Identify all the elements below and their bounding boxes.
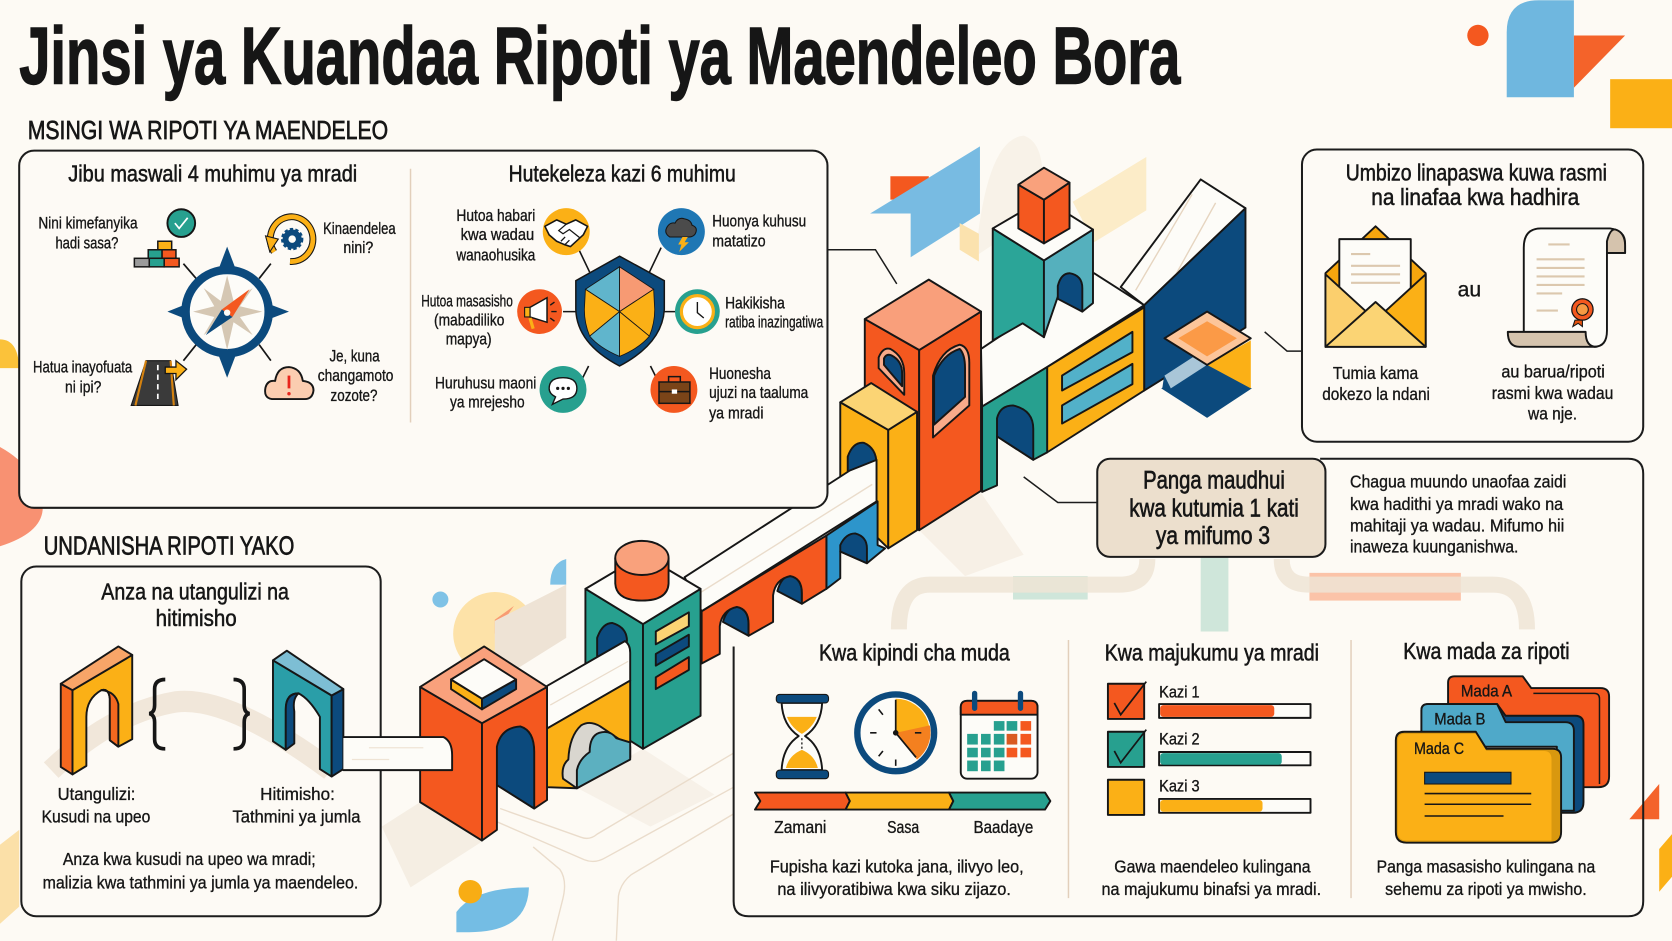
- column: timeline: na ilivyoratibiwa kwa siku zijazo.: [777, 879, 1011, 899]
- task 1: Kazi 1: [1159, 683, 1200, 702]
- folder C: Mada C: [1414, 739, 1464, 758]
- icon: gear cycle: [266, 217, 313, 262]
- task labels: Huonesha: [709, 364, 772, 383]
- icon: envelope: [1325, 226, 1426, 347]
- column: topics: Kwa mada za ripoti: [1403, 638, 1570, 664]
- description text: Chagua muundo unaofaa zaidi: [1350, 472, 1566, 492]
- ramp: [1121, 179, 1245, 391]
- folder B: [1421, 704, 1583, 813]
- description text: inaweza kuunganishwa.: [1350, 537, 1518, 557]
- format labels: Tumia kama: [1333, 363, 1418, 383]
- arch labels: Utangulizi:: [58, 784, 135, 804]
- folder A: Mada A: [1461, 682, 1512, 701]
- link tubes: [899, 557, 1527, 632]
- connector: format panel to cube: [1265, 332, 1302, 351]
- task 2: [1108, 730, 1311, 767]
- blue arcade: [826, 501, 885, 589]
- icon: speech bubble: [540, 366, 586, 413]
- format labels: rasmi kwa wadau: [1492, 383, 1613, 403]
- task labels: ya mrejesho: [450, 393, 525, 412]
- heading: umbizo: [1346, 159, 1607, 210]
- task 3: [1108, 776, 1311, 815]
- column: timeline: Kwa kipindi cha muda: [819, 639, 1010, 665]
- icon: briefcase: [650, 366, 697, 413]
- orange box on teal tower: [1018, 168, 1070, 243]
- text: or: au: [1458, 278, 1481, 302]
- column: tasks: Gawa maendeleo kulingana: [1114, 857, 1311, 877]
- heading: intro and conclusion: hitimisho: [156, 605, 237, 631]
- icon: blocks: [134, 241, 179, 267]
- arch labels: Tathmini ya jumla: [232, 806, 361, 826]
- icon: hourglass: [776, 694, 829, 779]
- icon: megaphone: [517, 289, 562, 334]
- icon: check badge: [167, 209, 195, 237]
- teal arch: [982, 367, 1047, 492]
- heading: six tasks: Hutekeleza kazi 6 muhimu: [509, 161, 736, 187]
- roof: [981, 273, 1144, 407]
- task labels: Huonya kuhusu: [712, 211, 806, 230]
- white beam to teal tower: [547, 641, 630, 729]
- column: topics: [1377, 638, 1609, 899]
- description: malizia kwa tathmini ya jumla ya maendeleo.: [43, 873, 358, 893]
- icon: storm: [658, 208, 705, 255]
- format labels: au barua/ripoti: [1501, 362, 1605, 382]
- task labels: (mabadiliko: [434, 310, 504, 329]
- question labels: nini?: [343, 238, 373, 257]
- icon: warning cloud: [265, 367, 314, 399]
- background shapes behind the isometric building: [870, 136, 1146, 262]
- panel: umbizo: [1302, 150, 1643, 442]
- isometric building: upper section: [840, 168, 1251, 548]
- yellow block with windows: [1047, 307, 1144, 452]
- task labels: ujuzi na taaluma: [709, 383, 809, 402]
- column: timeline: [755, 639, 1050, 899]
- folder C: [1396, 732, 1561, 843]
- arch labels: [42, 784, 361, 826]
- description: Anza kwa kusudi na upeo wa mradi;: [63, 849, 316, 869]
- white beam: [685, 460, 877, 611]
- beige callout box: kwa kutumia 1 kati: [1129, 495, 1299, 522]
- heading: four questions: Jibu maswali 4 muhimu ya mradi: [68, 161, 357, 187]
- arch labels: Kusudi na upeo: [42, 806, 151, 826]
- description text: kwa hadithi ya mradi wako na: [1350, 494, 1563, 514]
- connector: content box to tower: [1024, 477, 1097, 502]
- column: tasks: [1102, 639, 1321, 899]
- task labels: wanaohusika: [456, 245, 536, 264]
- folder B: Mada B: [1434, 709, 1485, 728]
- timeline labels: Sasa: [887, 817, 919, 837]
- task labels: [421, 206, 824, 422]
- question labels: changamoto: [318, 366, 393, 385]
- connector: msingi panel to tower: [827, 250, 897, 284]
- column: topics: Panga masasisho kulingana na: [1377, 857, 1595, 877]
- beige callout box: ya mifumo 3: [1156, 523, 1270, 550]
- question labels: Kinaendelea: [323, 219, 396, 238]
- panel: panga maudhui: [734, 459, 1643, 916]
- timeline labels: Baadaye: [974, 817, 1033, 837]
- description text: mahitaji ya wadau. Mifumo hii: [1350, 515, 1564, 535]
- pale route lines: [382, 493, 1024, 941]
- icon: compass: [167, 247, 289, 378]
- icon: conclusion arch: [273, 651, 343, 777]
- question labels: hadi sasa?: [55, 234, 118, 253]
- orange arcade: [702, 536, 826, 664]
- task labels: Hakikisha: [725, 293, 785, 312]
- column: tasks: na majukumu binafsi ya mradi.: [1102, 879, 1321, 899]
- icon: scroll with seal: [1508, 228, 1625, 347]
- column: topics: sehemu za ripoti ya mwisho.: [1385, 879, 1587, 899]
- format labels: [1322, 362, 1613, 423]
- isometric building: lower section: [343, 541, 701, 841]
- task labels: kwa wadau: [461, 225, 534, 244]
- panel: msingi: [19, 151, 827, 508]
- teal tower with windows: [585, 555, 701, 749]
- task 2: Kazi 2: [1159, 730, 1200, 749]
- heading: intro and conclusion: Anza na utangulizi na: [101, 579, 289, 605]
- task labels: ya mradi: [709, 403, 763, 422]
- yellow bridge with cloud: [547, 681, 630, 788]
- column: tasks: Kwa majukumu ya mradi: [1105, 639, 1319, 665]
- cylinder on teal tower: [615, 541, 669, 601]
- question labels: Hatua inayofuata: [33, 357, 133, 376]
- task labels: Hutoa masasisho: [421, 291, 513, 310]
- task labels: ratiba inazingatiwa: [725, 313, 824, 332]
- icon: handshake: [543, 208, 590, 255]
- panel: undanisha: [21, 566, 381, 916]
- icon: clock: [857, 694, 934, 771]
- icon: intro arch: [61, 646, 132, 774]
- task labels: mapya): [446, 330, 492, 349]
- column: timeline: Fupisha kazi kutoka jana, ilivyo leo,: [770, 857, 1024, 877]
- task 1: [1108, 682, 1311, 719]
- format labels: dokezo la ndani: [1322, 384, 1430, 404]
- heading: undanisha: UNDANISHA RIPOTI YAKO: [44, 533, 294, 561]
- heading: umbizo: Umbizo linapaswa kuwa rasmi: [1346, 159, 1607, 185]
- question labels: ni ipi?: [65, 378, 101, 397]
- diamond cube: [1162, 312, 1251, 417]
- task labels: Hutoa habari: [456, 206, 535, 225]
- teal tower: [993, 199, 1093, 340]
- orange tall tower: [865, 280, 981, 530]
- question labels: zozote?: [331, 386, 377, 405]
- description text: [1350, 472, 1566, 557]
- beige callout box: [1097, 459, 1325, 557]
- timeline arrow: [755, 793, 1050, 810]
- icon: left brace: [149, 680, 165, 749]
- task 3: Kazi 3: [1159, 776, 1200, 795]
- timeline labels: Zamani: [774, 817, 826, 837]
- task labels: Huruhusu maoni: [435, 373, 536, 392]
- icon: shield: [563, 248, 676, 387]
- icon: calendar: [961, 693, 1038, 779]
- icon: road with arrow: [131, 361, 187, 405]
- heading: msingi: MSINGI WA RIPOTI YA MAENDELEO: [28, 117, 388, 145]
- icon: right brace: [234, 680, 250, 749]
- question labels: Je, kuna: [329, 347, 380, 366]
- description: [43, 849, 358, 892]
- orange front tower: [420, 646, 547, 841]
- heading: umbizo: na linafaa kwa hadhira: [1371, 184, 1579, 210]
- title: Jinsi ya Kuandaa Ripoti ya Maendeleo Bora: [19, 11, 1181, 101]
- icon: clock: [675, 289, 720, 334]
- folder A: [1448, 676, 1609, 787]
- format labels: wa nje.: [1527, 403, 1577, 423]
- beige callout box: Panga maudhui: [1143, 468, 1285, 495]
- heading: intro and conclusion: [101, 579, 289, 631]
- yellow front tower: [840, 383, 917, 548]
- horizontal beam: [343, 737, 452, 770]
- task labels: matatizo: [712, 232, 766, 251]
- timeline labels: [774, 817, 1033, 837]
- question labels: [33, 213, 396, 405]
- question labels: Nini kimefanyika: [38, 213, 138, 232]
- arch labels: Hitimisho:: [260, 784, 335, 804]
